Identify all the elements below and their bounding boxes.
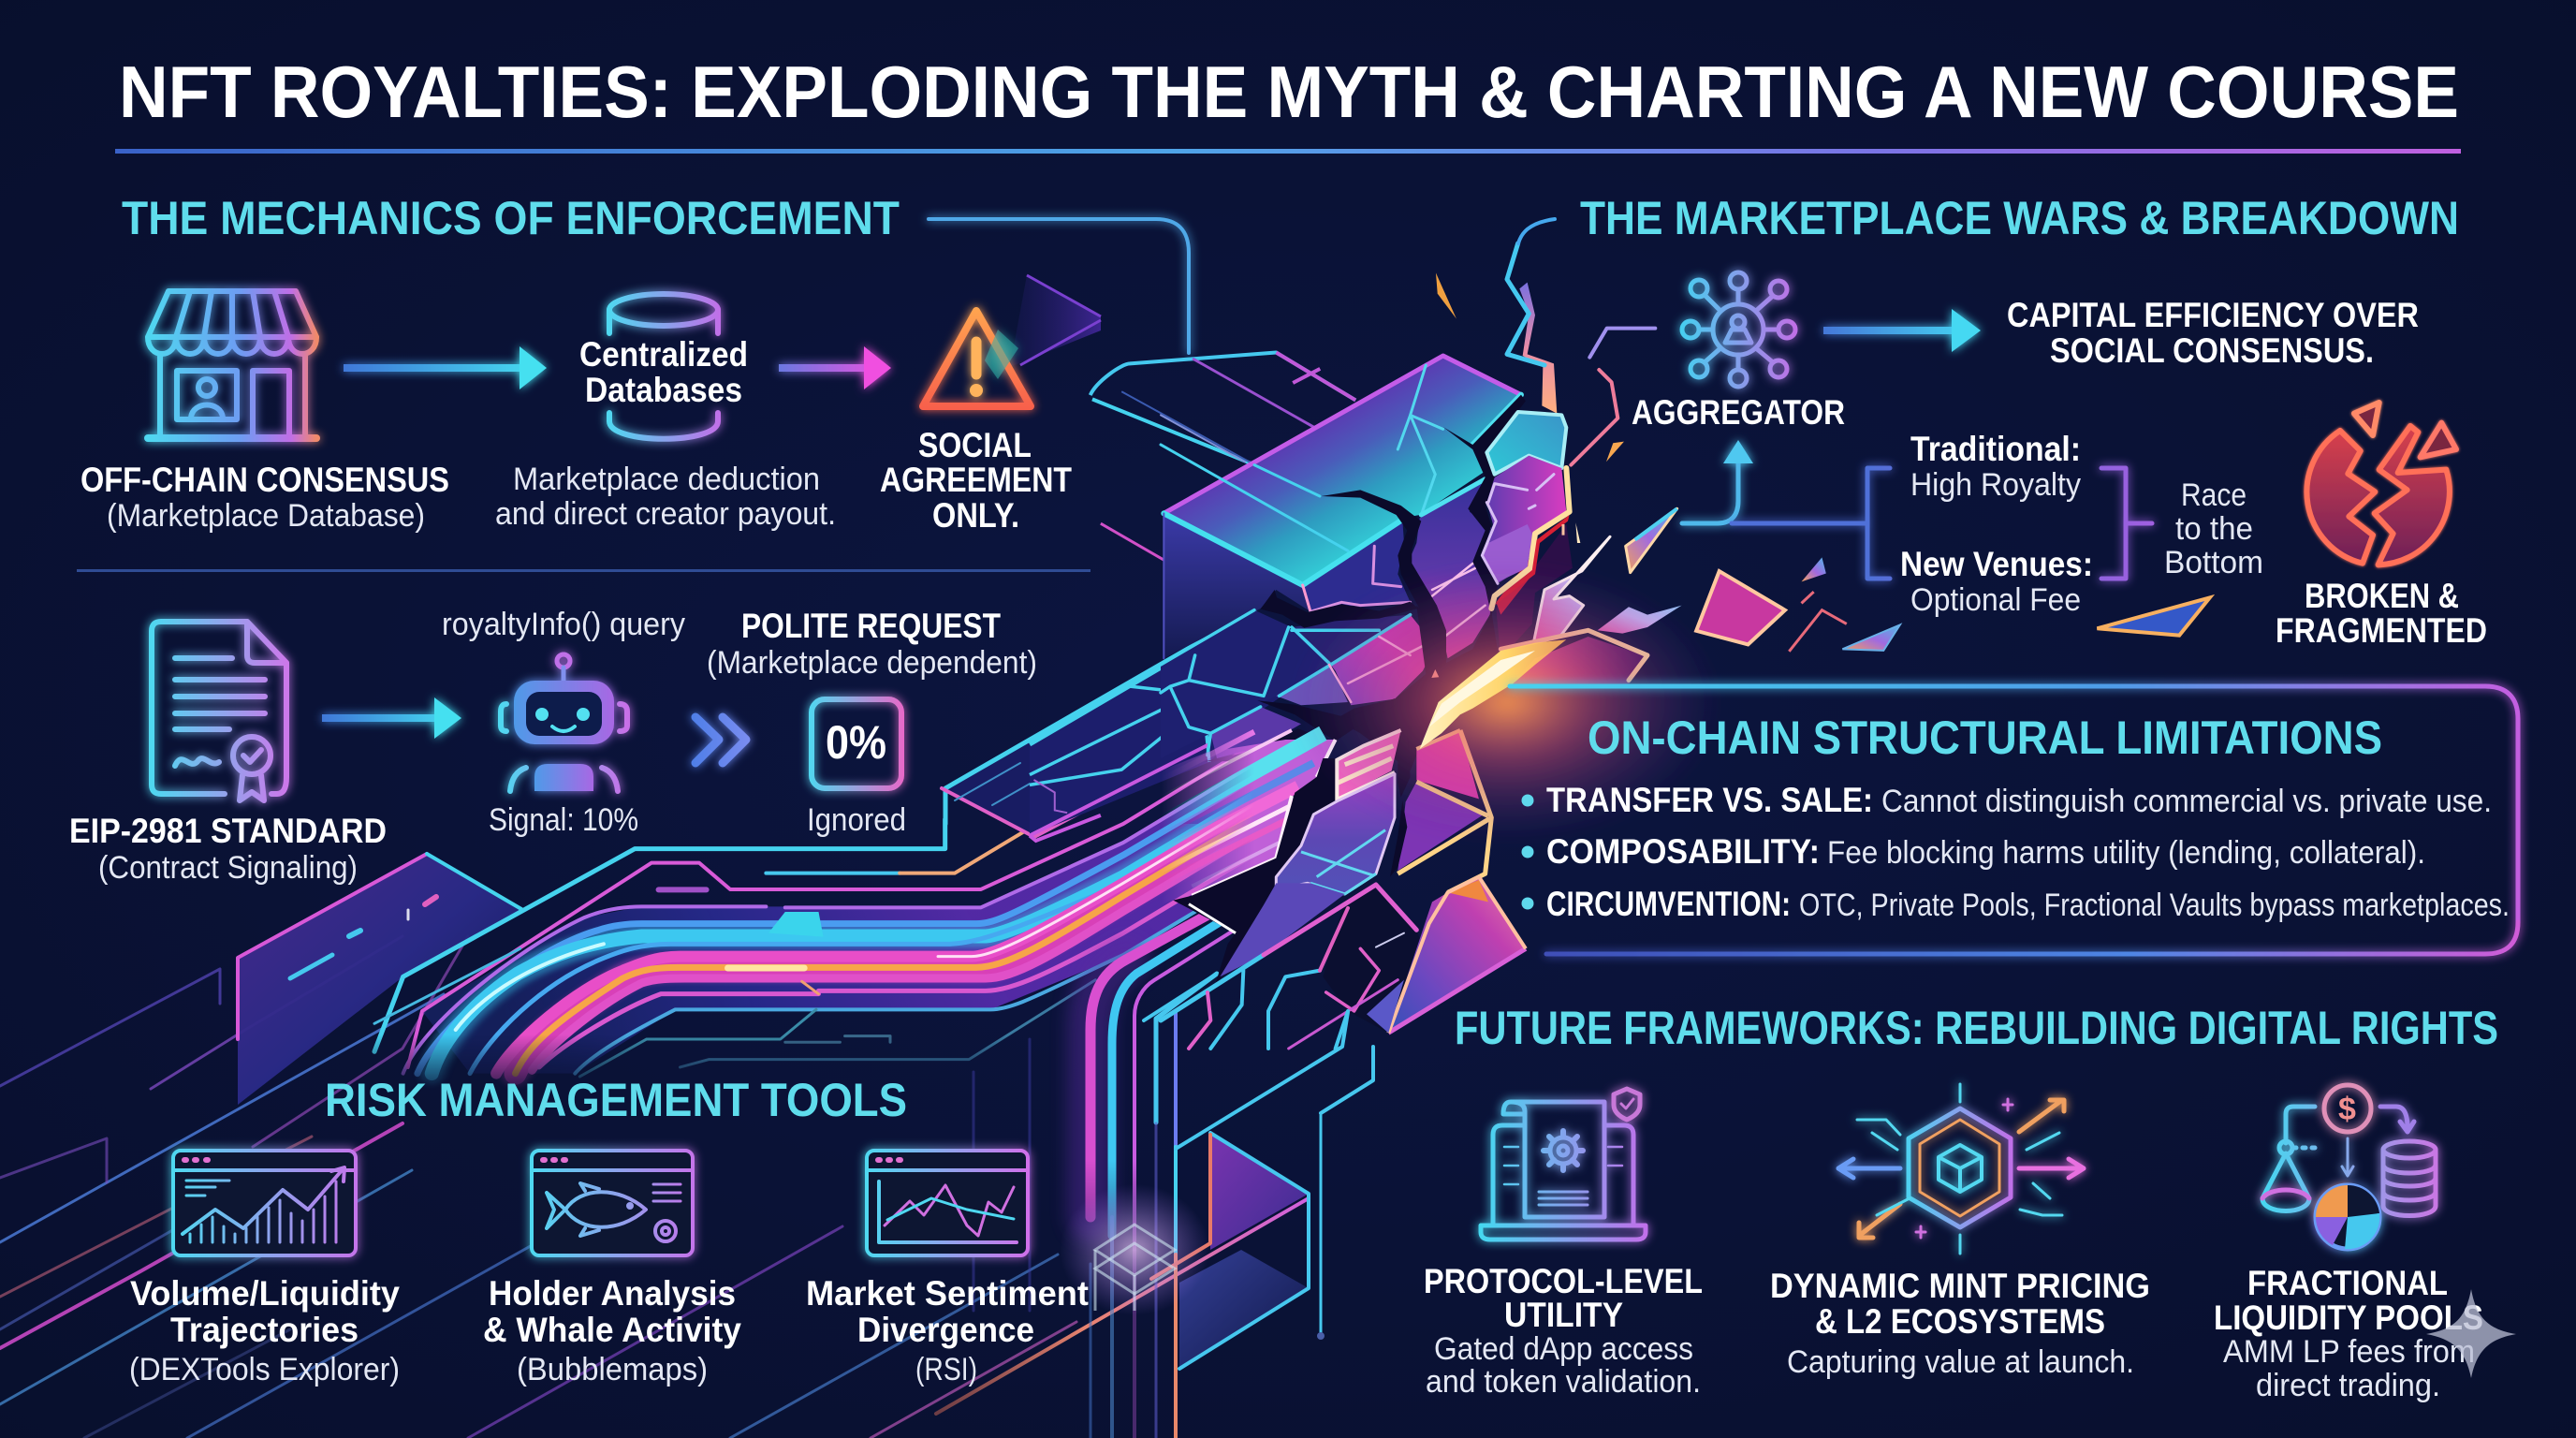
tool: holder label: & Whale Activity xyxy=(483,1311,741,1349)
label: social agreement only: SOCIAL xyxy=(918,426,1032,464)
decorative house shape xyxy=(238,854,521,1105)
arrow xyxy=(779,346,891,389)
pink top right xyxy=(1416,730,1479,799)
icon: storefront xyxy=(148,291,316,438)
icon: warning triangle xyxy=(923,311,1031,406)
crystal: main body xyxy=(1161,356,1573,770)
ribbon band fill xyxy=(423,771,1247,1073)
tool: holder window icon xyxy=(532,1151,693,1255)
label: broken and fragmented: BROKEN & xyxy=(2305,577,2459,615)
bullet: composability xyxy=(1522,832,2425,871)
bottom isometric cube xyxy=(1151,1133,1309,1369)
label: dynamic mint pricing: & L2 ECOSYSTEMS xyxy=(1815,1302,2105,1341)
label: social agreement only: ONLY. xyxy=(932,496,1019,535)
panel: risk management tools xyxy=(129,1074,1089,1387)
bullet: circumvention: CIRCUMVENTION: xyxy=(1546,885,1791,923)
tool: holder label: Holder Analysis xyxy=(489,1274,736,1313)
tool: volume label: Volume/Liquidity xyxy=(130,1274,400,1313)
arrow up to aggregator xyxy=(1682,440,1753,523)
label: centralized databases xyxy=(579,335,748,409)
label: off-chain consensus xyxy=(80,461,449,534)
label: protocol-level utility: UTILITY xyxy=(1504,1296,1623,1334)
icon: contract document xyxy=(152,622,286,800)
indigo lower shard xyxy=(1220,883,1345,976)
panel: the mechanics of enforcement xyxy=(69,192,1189,886)
label: broken and fragmented xyxy=(2276,577,2487,650)
heading: on-chain: ON-CHAIN STRUCTURAL LIMITATIONS xyxy=(1588,712,2382,764)
dark maroon gap xyxy=(1496,524,1573,658)
tool: sentiment label: Divergence xyxy=(857,1311,1034,1349)
label: fractional liquidity pools: direct trading. xyxy=(2256,1368,2440,1403)
label: eip-2981 standard: (Contract Signaling) xyxy=(98,850,358,886)
centre column xyxy=(1407,480,1495,658)
tool: holder label xyxy=(483,1274,741,1387)
background diagonal circuit lines xyxy=(0,936,1309,1438)
icon: chevrons xyxy=(695,717,746,763)
connector from heading to crystal xyxy=(929,219,1189,353)
label: social agreement only xyxy=(880,426,1072,535)
explosion flare xyxy=(1292,562,1722,843)
bullet: composability: COMPOSABILITY: xyxy=(1546,832,1820,871)
text: ignored: Ignored xyxy=(807,802,906,838)
icon: zero percent box xyxy=(812,699,901,788)
cream ribbon shard xyxy=(1337,730,1401,799)
vertical ribbons xyxy=(1090,889,1373,1438)
bullet: transfer vs sale: Cannot distinguish commercial vs. private use. xyxy=(1881,784,2492,819)
dark pocket behind wedge xyxy=(1323,885,1426,1033)
crystal: connector outline behind slab xyxy=(1030,352,1355,841)
tool: sentiment label: Market Sentiment xyxy=(806,1274,1089,1313)
arrow xyxy=(344,346,547,389)
text: new venues: Optional Fee xyxy=(1910,582,2081,618)
sparkle watermark xyxy=(2426,1289,2516,1378)
tool: volume label: (DEXTools Explorer) xyxy=(129,1352,400,1387)
bullet: transfer vs sale xyxy=(1522,781,2492,819)
tool: sentiment label xyxy=(806,1274,1089,1387)
label: fractional liquidity pools: FRACTIONAL xyxy=(2247,1264,2448,1302)
label: centralized databases: Databases xyxy=(585,371,742,409)
bottom right shard xyxy=(1388,877,1526,1033)
central cracked crystal xyxy=(942,243,1682,1049)
edge lines xyxy=(1161,356,1521,756)
label: protocol-level utility: PROTOCOL-LEVEL xyxy=(1424,1262,1703,1300)
label: protocol-level utility xyxy=(1424,1262,1703,1400)
crack: centre void xyxy=(1336,606,1500,770)
icon: database cylinder xyxy=(609,294,718,439)
panel: on-chain structural limitations xyxy=(1510,686,2518,954)
bracket diagram xyxy=(1732,468,2152,579)
crystal: right shards xyxy=(1482,243,1682,685)
icon: broken circle xyxy=(2306,403,2456,565)
label: centralized databases: Centralized xyxy=(579,335,748,374)
speckled purple shard xyxy=(1276,774,1395,894)
ribbons breaking into stripes xyxy=(1161,730,1336,905)
crack: lower branch xyxy=(1257,698,1398,741)
crack: upper branch xyxy=(1443,395,1526,616)
text: capital efficiency xyxy=(2007,296,2419,370)
heading: mechanics: THE MECHANICS OF ENFORCEMENT xyxy=(122,192,900,244)
tool: sentiment label: (RSI) xyxy=(915,1352,977,1387)
text: race to the bottom: to the xyxy=(2175,511,2253,547)
teal piece xyxy=(1486,412,1566,475)
text: capital efficiency: CAPITAL EFFICIENCY OVER xyxy=(2007,296,2419,334)
panel border xyxy=(1510,686,2518,954)
title rule xyxy=(115,149,2461,154)
tool: sentiment window icon xyxy=(867,1151,1028,1255)
tool: holder label: (Bubblemaps) xyxy=(517,1352,708,1387)
label: broken and fragmented: FRAGMENTED xyxy=(2276,611,2487,650)
tool: volume window icon xyxy=(173,1151,356,1255)
dollar sign: $ xyxy=(2338,1092,2356,1127)
icon: zero percent box: 0% xyxy=(826,716,886,769)
label: off-chain consensus: (Marketplace Database) xyxy=(107,498,425,534)
label: dynamic mint pricing: DYNAMIC MINT PRICING xyxy=(1770,1267,2150,1305)
text: marketplace deduction: and direct creator payout. xyxy=(495,496,836,532)
text: new venues: New Venues: xyxy=(1900,545,2093,583)
bullet: transfer vs sale: TRANSFER VS. SALE: xyxy=(1546,781,1873,819)
glass cube xyxy=(1060,1184,1209,1315)
drip lines xyxy=(1161,885,1416,1049)
ribbon lines xyxy=(374,727,1281,1077)
label: aggregator: AGGREGATOR xyxy=(1632,393,1845,432)
label: polite request xyxy=(707,607,1037,681)
text: traditional xyxy=(1910,430,2081,503)
text: capital efficiency: SOCIAL CONSENSUS. xyxy=(2050,331,2374,370)
label: eip-2981 standard: EIP-2981 STANDARD xyxy=(69,812,387,850)
tool: volume label: Trajectories xyxy=(170,1311,359,1349)
label: dynamic mint pricing xyxy=(1770,1267,2150,1380)
panel: the marketplace wars xyxy=(1518,192,2487,650)
flow band and data ribbons xyxy=(374,727,1281,1077)
label: social agreement only: AGREEMENT xyxy=(880,461,1072,499)
label: protocol-level utility: and token validation. xyxy=(1426,1364,1701,1400)
icon: laptop with protocol document xyxy=(1481,1089,1646,1240)
tool: volume label xyxy=(129,1274,400,1387)
text: traditional: High Royalty xyxy=(1910,467,2081,503)
wedge gap xyxy=(1173,758,1339,990)
top face xyxy=(1164,356,1521,585)
lower slab xyxy=(1161,610,1331,758)
crystal: rear slab extension toward ribbon outline xyxy=(942,610,1273,837)
label: off-chain consensus: OFF-CHAIN CONSENSUS xyxy=(80,461,449,499)
pale pink flying shard xyxy=(1533,536,1610,643)
text: race to the bottom: Bottom xyxy=(2164,545,2263,580)
pink fill below flare xyxy=(1510,637,1645,685)
text: new venues xyxy=(1900,545,2093,618)
crystal: lower slab left end xyxy=(1030,612,1322,836)
text: race to the bottom xyxy=(2164,477,2263,580)
text: race to the bottom: Race xyxy=(2181,477,2247,513)
label: fractional liquidity pools xyxy=(2214,1264,2483,1403)
text: royaltyinfo query: royaltyInfo() query xyxy=(442,607,685,642)
text: traditional: Traditional: xyxy=(1910,430,2081,468)
flying shards xyxy=(1436,273,2210,652)
label: fractional liquidity pools: AMM LP fees from xyxy=(2223,1334,2475,1370)
arrow xyxy=(1823,309,1981,352)
panel: future frameworks xyxy=(1424,1002,2498,1403)
text: signal 10 percent: Signal: 10% xyxy=(489,802,638,838)
title: NFT ROYALTIES: EXPLODING THE MYTH & CHARTING A NEW COURSE xyxy=(119,51,2459,133)
crack: main branch xyxy=(1322,490,1446,663)
icon: aggregator hub xyxy=(1682,272,1795,387)
text: marketplace deduction: Marketplace deduction xyxy=(513,462,820,497)
label: polite request: POLITE REQUEST xyxy=(741,607,1001,645)
connector from heading into zigzag xyxy=(1518,219,1555,243)
label: polite request: (Marketplace dependent) xyxy=(707,645,1037,681)
icon: robot xyxy=(501,654,627,791)
zigzag edge xyxy=(1519,283,1557,414)
label: protocol-level utility: Gated dApp access xyxy=(1434,1331,1693,1367)
heading: risk management: RISK MANAGEMENT TOOLS xyxy=(325,1074,907,1126)
crack: left branch xyxy=(1261,590,1418,628)
label: fractional liquidity pools: LIQUIDITY POOLS xyxy=(2214,1299,2483,1337)
text: marketplace deduction xyxy=(495,462,836,532)
heading: marketplace wars: THE MARKETPLACE WARS & BREAKDOWN xyxy=(1580,192,2459,244)
cyan data block on ribbon xyxy=(768,912,824,937)
crystal: lower shards xyxy=(1161,730,1526,1049)
icon: hexagon with arrows xyxy=(1838,1084,2084,1254)
bullet: composability: Fee blocking harms utility (lending, collateral). xyxy=(1827,835,2425,871)
label: dynamic mint pricing: Capturing value at launch. xyxy=(1787,1344,2134,1380)
icon: fractional liquidity xyxy=(2262,1085,2436,1249)
bullet: circumvention xyxy=(1522,885,2510,923)
front side of slab xyxy=(1164,513,1310,658)
decorative dark prism behind warning xyxy=(1010,275,1101,367)
arrow xyxy=(322,697,461,739)
label: eip-2981 standard xyxy=(69,812,387,886)
